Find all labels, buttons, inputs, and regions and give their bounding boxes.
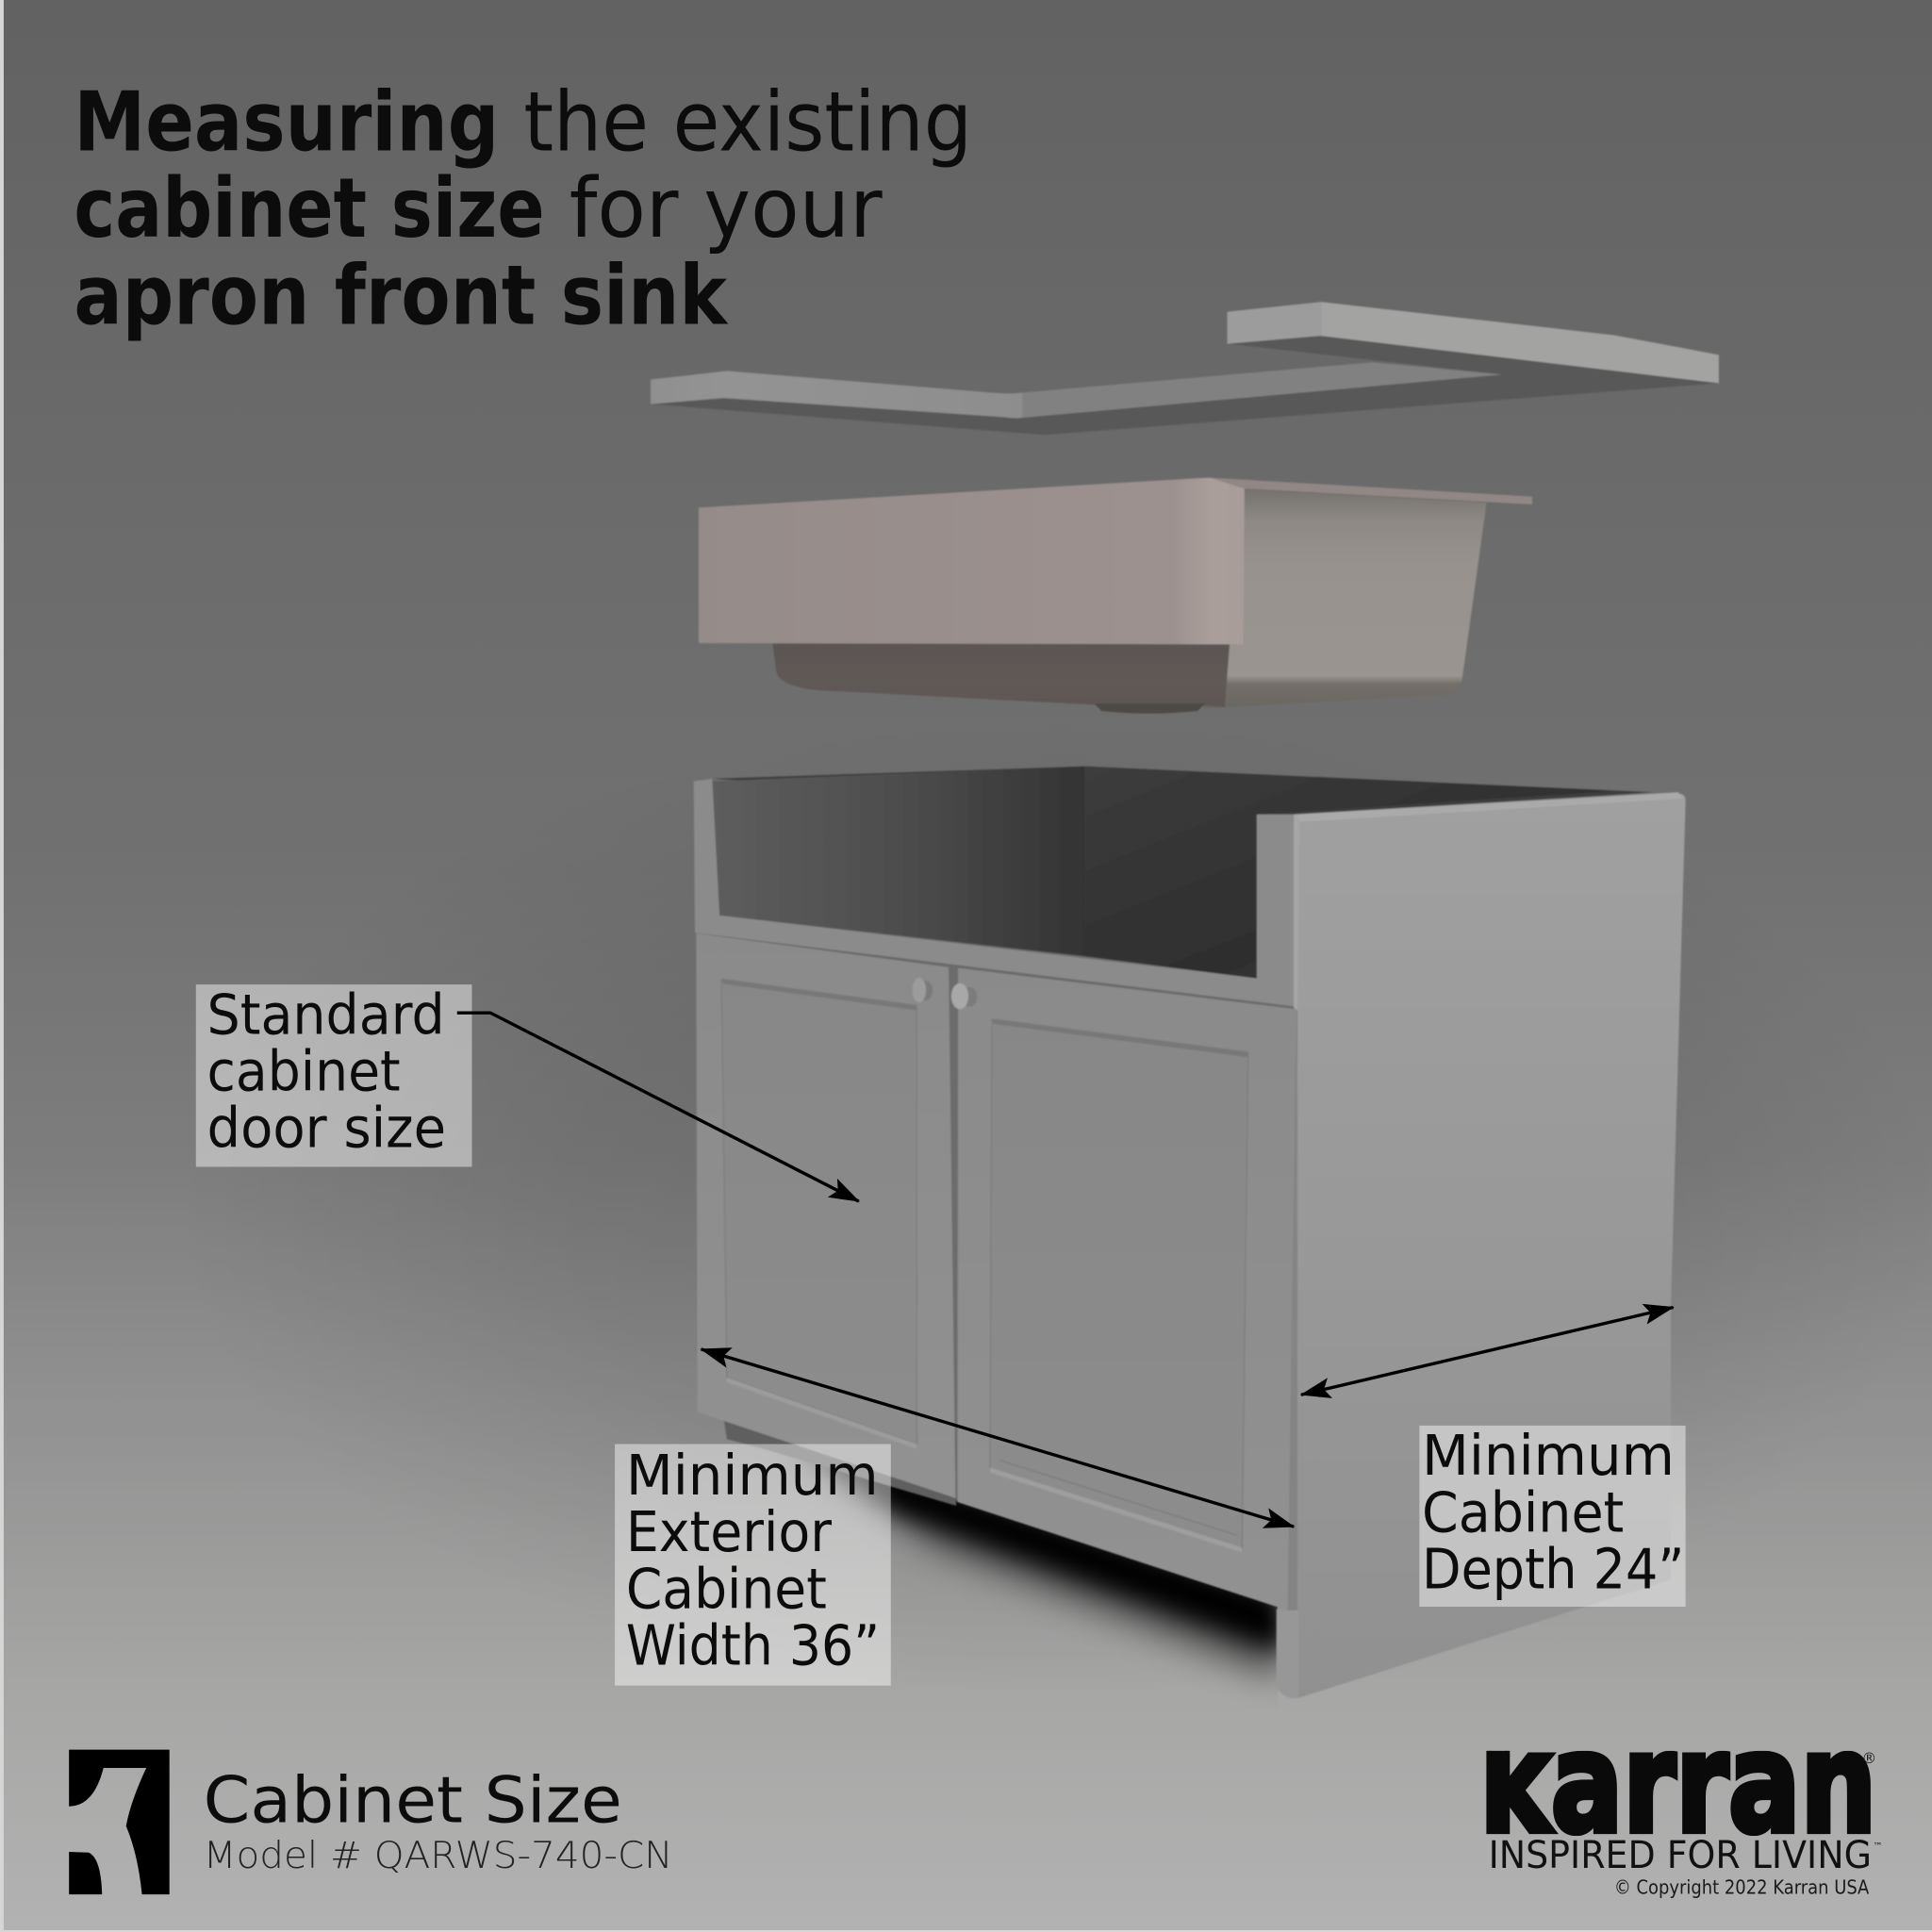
upper stile highlight — [1294, 815, 1300, 1011]
Karran logo — [1486, 1750, 1880, 1898]
side panel top highlight — [1294, 792, 1683, 822]
callout: minimum cabinet depth: Depth 24” — [1422, 1536, 1684, 1601]
footer heading: cabinet size and model: Model # QARWS-740-CN — [204, 1835, 672, 1877]
right knob — [951, 983, 968, 1009]
background: ambient shading around cabinet — [0, 616, 1932, 1799]
sink bowl underside — [772, 643, 1230, 707]
countertop — [651, 302, 1719, 435]
footer heading: cabinet size and model — [204, 1764, 672, 1877]
arrow: exterior cabinet width — [702, 1349, 1294, 1527]
right door top bevel — [992, 1019, 1248, 1057]
apron front sink — [699, 478, 1532, 714]
floor shadow under cabinet — [788, 1435, 1281, 1678]
sink base cabinet — [694, 767, 1686, 1698]
left knob stem — [918, 981, 933, 1000]
right door inner groove — [999, 1461, 1237, 1535]
icon: Karran K mark — [69, 1750, 170, 1894]
callout: minimum cabinet depth — [1419, 1423, 1686, 1607]
countertop front strip left — [651, 371, 1023, 419]
left door lower bevel — [727, 1378, 916, 1449]
sink apron front — [699, 478, 1245, 644]
sink side wall — [1204, 488, 1487, 708]
right door panel — [990, 1019, 1248, 1549]
right cabinet door — [957, 968, 1296, 1610]
cabinet opening rear edge — [712, 767, 1654, 815]
right door lower bevel — [990, 1467, 1242, 1553]
callout: minimum exterior cabinet width — [615, 1443, 891, 1686]
arrow: cabinet depth — [1301, 1307, 1674, 1395]
cabinet face frame — [694, 779, 1296, 1007]
side panel lower front strip — [1277, 1610, 1298, 1698]
left knob — [913, 978, 926, 1002]
title — [74, 74, 972, 344]
countertop right return front — [1321, 302, 1719, 383]
title: for your — [570, 160, 883, 256]
toe kick — [723, 1417, 956, 1506]
door gap — [949, 967, 958, 1502]
callout: standard cabinet door size: Standard — [207, 982, 445, 1047]
title: Measuring — [74, 74, 499, 170]
sink drain — [1094, 703, 1205, 714]
callout: minimum cabinet depth: Cabinet — [1422, 1479, 1624, 1544]
callout: minimum cabinet depth: Minimum — [1422, 1423, 1675, 1488]
cabinet interior left wall — [712, 767, 1084, 956]
callout: minimum exterior cabinet width: Cabinet — [626, 1556, 827, 1621]
Karran logo: ™ — [1873, 1841, 1883, 1852]
cabinet interior right wall — [1084, 767, 1614, 979]
left door top bevel — [721, 979, 916, 1011]
callout: minimum exterior cabinet width: Minimum — [626, 1443, 879, 1508]
callout: standard cabinet door size: cabinet — [207, 1038, 401, 1103]
countertop underside — [651, 336, 1719, 435]
Karran logo: © Copyright 2022 Karran USA — [1614, 1875, 1869, 1898]
callout: minimum exterior cabinet width: Width 36” — [626, 1612, 880, 1677]
arrow: door size leader — [457, 1013, 859, 1201]
title: apron front sink — [74, 248, 729, 344]
left cabinet door — [696, 933, 956, 1498]
right knob stem — [963, 987, 977, 1007]
left door panel — [721, 979, 916, 1445]
callout: standard cabinet door size — [196, 982, 471, 1167]
countertop back edge strip — [1023, 362, 1502, 418]
callout: standard cabinet door size: door size — [207, 1096, 446, 1161]
callout: minimum exterior cabinet width: Exterior — [626, 1499, 833, 1564]
title: the existing — [523, 74, 972, 170]
Karran logo: INSPIRED FOR LIVING — [1489, 1832, 1872, 1877]
side panel — [1277, 794, 1686, 1698]
footer heading: cabinet size and model: Cabinet Size — [204, 1764, 622, 1839]
countertop right return end — [1228, 302, 1321, 344]
Karran logo: ® — [1862, 1749, 1876, 1767]
title: cabinet size — [74, 160, 545, 256]
sink rim — [1210, 478, 1532, 504]
side panel front edge — [1288, 1011, 1297, 1611]
